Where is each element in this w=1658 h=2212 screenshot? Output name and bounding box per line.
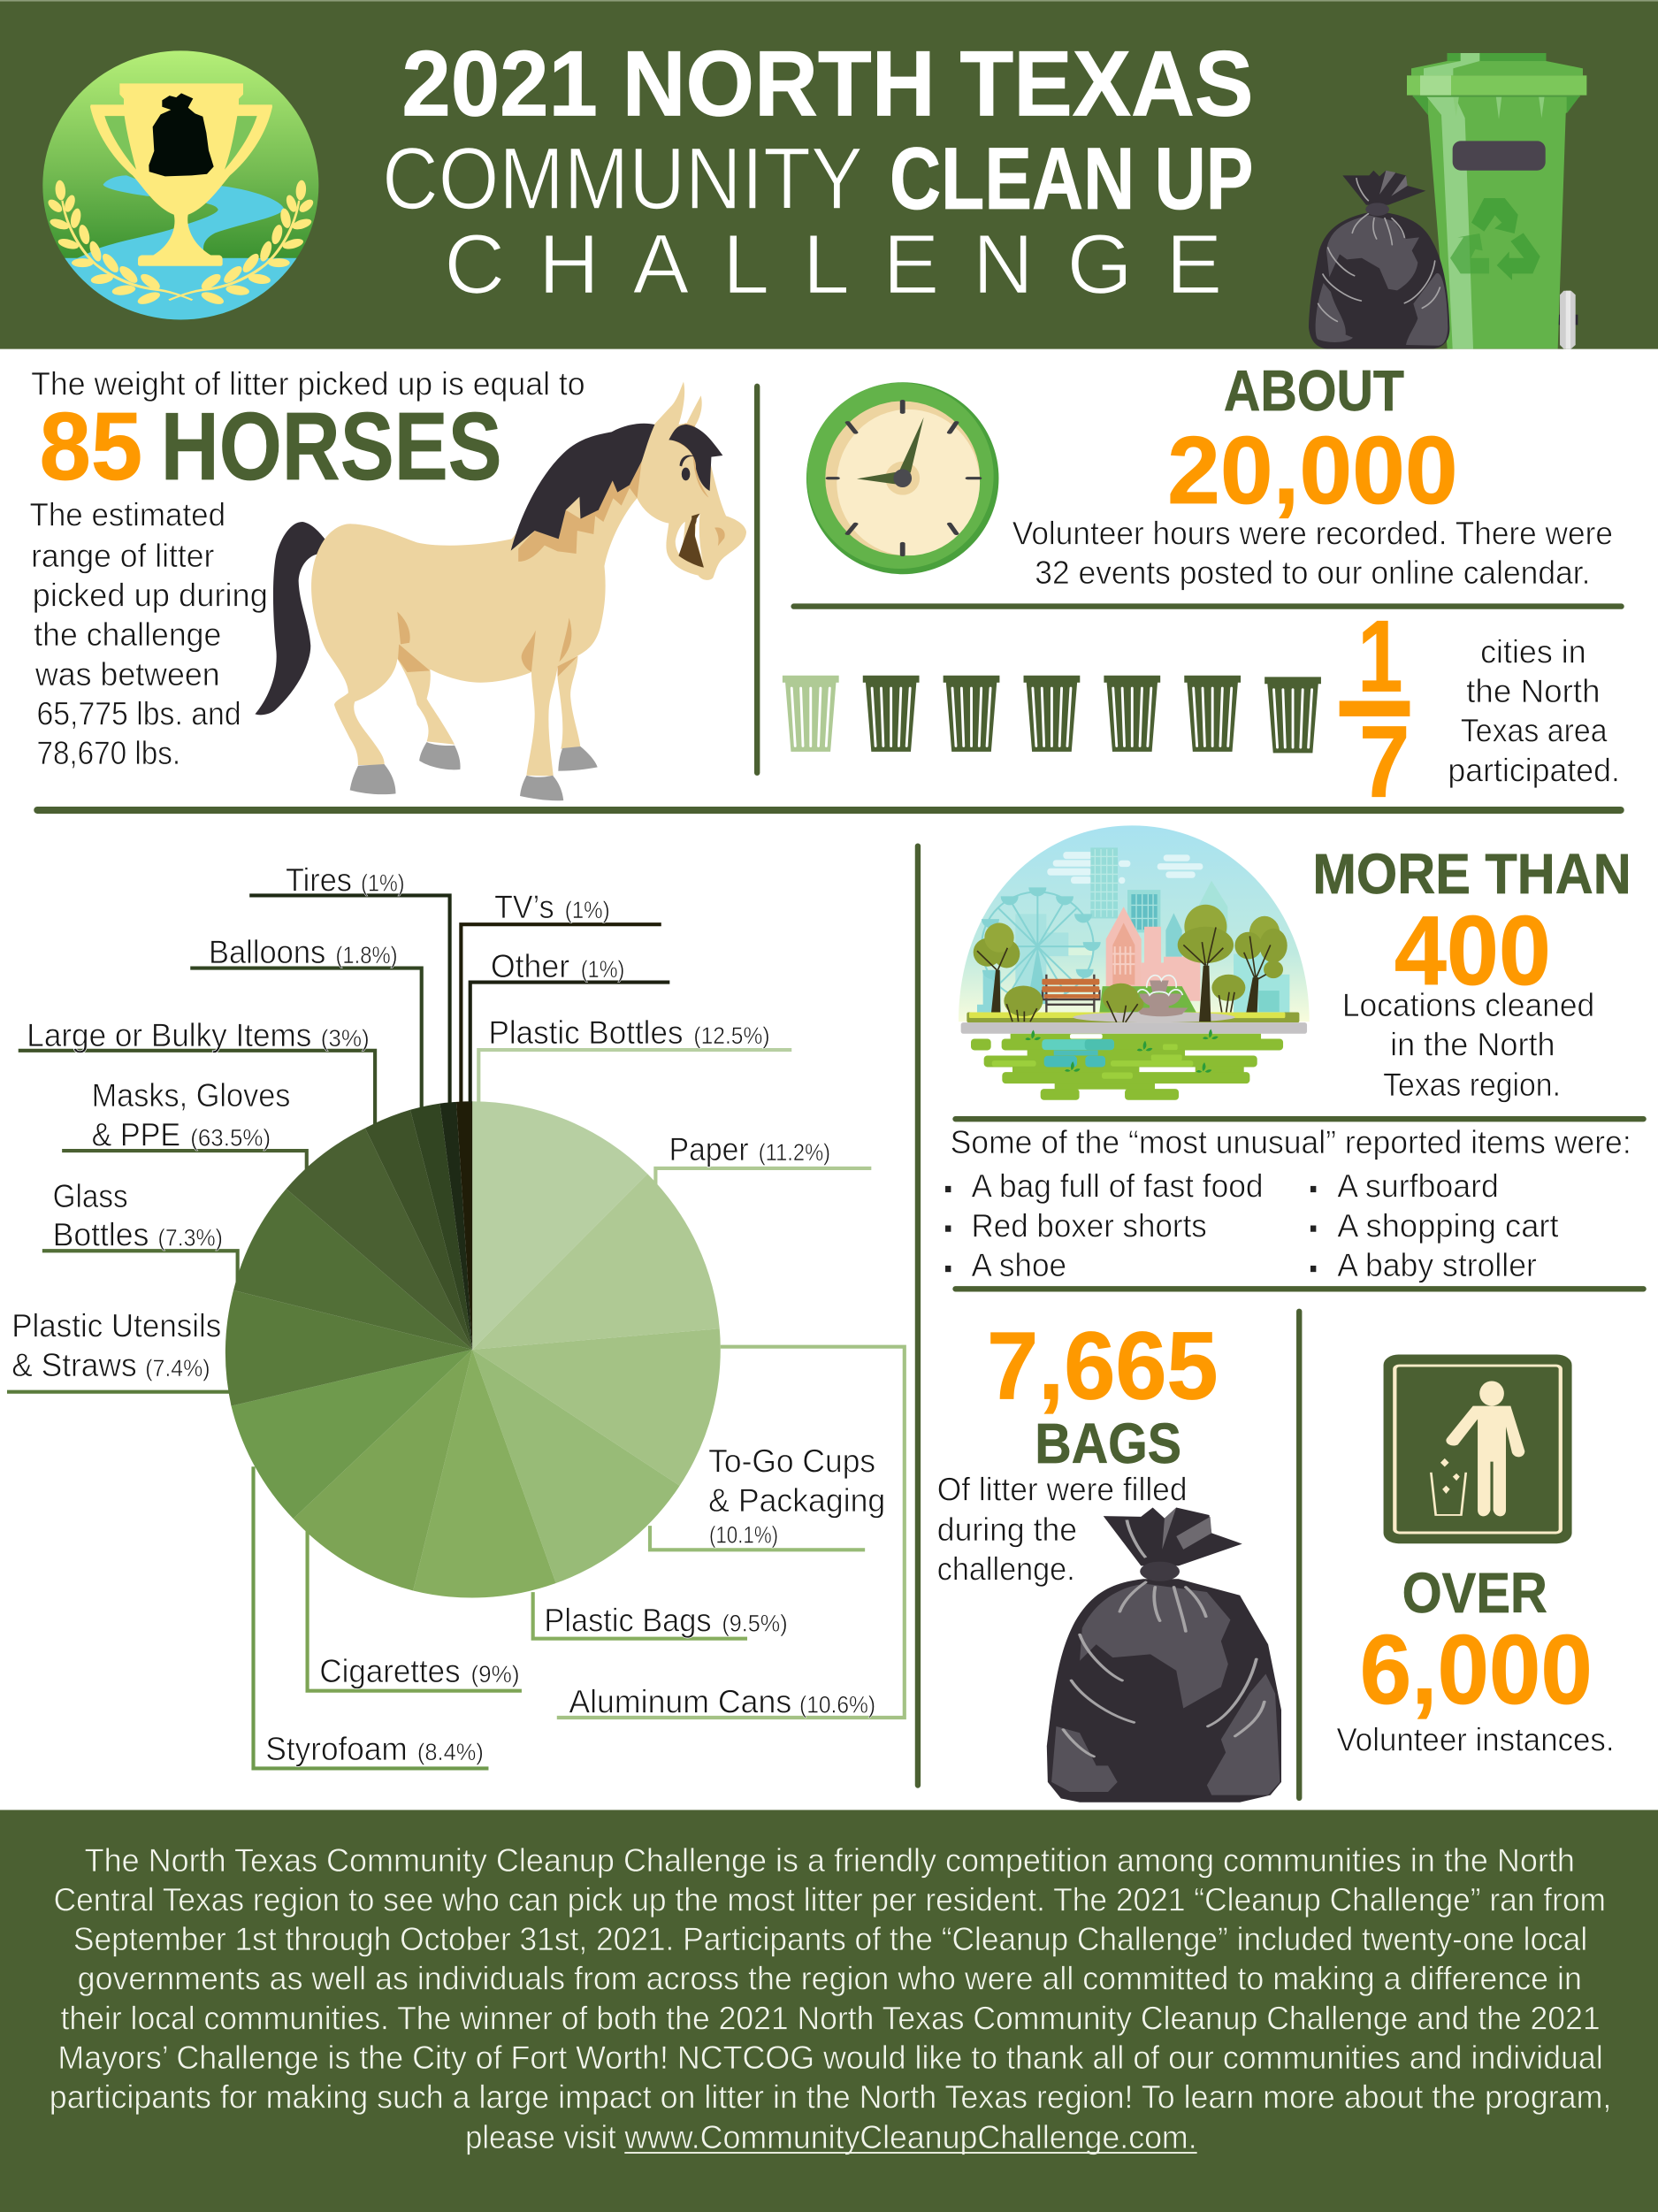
label: large or bulky items: Large or Bulky Items bbox=[27, 1017, 311, 1053]
title bbox=[382, 33, 1253, 312]
heading: horses: HORSES bbox=[161, 393, 502, 500]
text: bags: challenge. bbox=[937, 1550, 1075, 1588]
text: estimated range: 78,670 lbs. bbox=[36, 734, 180, 771]
label: aluminum cans: Aluminum Cans bbox=[569, 1683, 791, 1719]
text: volunteer instances: Volunteer instances. bbox=[1336, 1720, 1615, 1757]
section: bags bbox=[937, 1313, 1281, 1803]
heading: over: OVER bbox=[1402, 1561, 1547, 1625]
footer text: their local communities. The winner of both the 2021 North Texas Community Cleanup Challenge and the 2021 bbox=[61, 1999, 1601, 2036]
label: paper: Paper bbox=[669, 1131, 749, 1167]
label: tires bbox=[286, 862, 405, 899]
section: volunteer hours bbox=[806, 358, 1613, 591]
text: estimated range: the challenge bbox=[34, 616, 221, 653]
label: paper: (11.2%) bbox=[759, 1138, 830, 1166]
divider bbox=[915, 843, 921, 1788]
label: tvs: TV’s bbox=[494, 889, 554, 925]
footer text: The North Texas Community Cleanup Challenge is a friendly competition among communities in the North bbox=[85, 1841, 1575, 1879]
text: estimated range: range of litter bbox=[31, 537, 214, 574]
text: locations: Locations cleaned bbox=[1342, 986, 1594, 1023]
list: right column: A surfboard bbox=[1337, 1167, 1499, 1205]
stat: 85: 85 bbox=[40, 393, 142, 500]
label: balloons bbox=[209, 934, 398, 970]
label: aluminum cans: (10.6%) bbox=[799, 1690, 875, 1718]
section: unusual items bbox=[945, 1123, 1631, 1283]
label: balloons: (1.8%) bbox=[335, 941, 398, 968]
divider bbox=[1296, 1309, 1302, 1801]
label: plastic bags: Plastic Bags bbox=[544, 1603, 712, 1639]
icon: seven trash cans bbox=[783, 676, 1321, 753]
icon: recycling bin bbox=[1407, 53, 1586, 348]
text: bags: during the bbox=[937, 1511, 1077, 1548]
label: to-go cups bbox=[708, 1443, 885, 1548]
footer text: www.CommunityCleanupChallenge.com. bbox=[623, 2118, 1197, 2155]
divider bbox=[754, 384, 760, 776]
text: locations: Texas region. bbox=[1383, 1066, 1561, 1103]
text: cities bbox=[1448, 632, 1620, 788]
label: masks gloves ppe: Masks, Gloves bbox=[92, 1077, 290, 1114]
heading: about: ABOUT bbox=[1224, 358, 1404, 423]
title line 1: 2021 NORTH TEXAS bbox=[401, 33, 1253, 136]
text: estimated range: picked up during bbox=[33, 577, 268, 614]
text: estimated range: 65,775 lbs. and bbox=[36, 695, 241, 732]
label: other: (1%) bbox=[581, 955, 624, 983]
label: tvs bbox=[494, 889, 610, 925]
label: tires: Tires bbox=[286, 862, 352, 899]
label: masks gloves ppe: & PPE bbox=[92, 1116, 180, 1152]
chart: pie chart of litter types bbox=[7, 862, 905, 1768]
stat: one seventh bbox=[1340, 600, 1410, 819]
divider bbox=[952, 1116, 1647, 1121]
icon: horse bbox=[255, 382, 746, 800]
text: unusual items intro: Some of the “most unusual” reported items were: bbox=[951, 1123, 1631, 1160]
label: to-go cups: (10.1%) bbox=[709, 1520, 778, 1548]
stat: 400: 400 bbox=[1394, 895, 1551, 1006]
footer text: September 1st through October 31st, 2021. Participants of the “Cleanup Challenge” included twenty-one local bbox=[73, 1920, 1587, 1957]
stat: 20,000: 20,000 bbox=[1167, 417, 1458, 524]
label: glass bottles bbox=[53, 1178, 223, 1253]
footer text: participants for making such a large impact on litter in the North Texas region! To learn more about the program, bbox=[50, 2078, 1611, 2116]
label: glass bottles: Bottles bbox=[53, 1217, 149, 1253]
divider bbox=[34, 807, 1624, 814]
title line 3: CHALLENGE bbox=[444, 218, 1222, 312]
section: locations bbox=[959, 825, 1631, 1103]
label: to-go cups: To-Go Cups bbox=[708, 1443, 875, 1480]
text: estimated range: was between bbox=[34, 655, 220, 693]
label: masks gloves ppe: (63.5%) bbox=[190, 1123, 271, 1151]
icon: city park bbox=[959, 825, 1310, 1100]
text: locations: in the North bbox=[1390, 1025, 1555, 1062]
label: styrofoam: (8.4%) bbox=[417, 1738, 484, 1765]
icon: small trash bag bbox=[1309, 171, 1449, 348]
text: weight intro: The weight of litter picked up is equal to bbox=[31, 364, 585, 402]
label: glass bottles: (7.3%) bbox=[158, 1224, 223, 1251]
text: bags: Of litter were filled bbox=[937, 1470, 1187, 1507]
heading: bags: BAGS bbox=[1035, 1412, 1181, 1475]
label: tvs: (1%) bbox=[565, 896, 610, 923]
label: plastic utensils: Plastic Utensils bbox=[11, 1308, 221, 1344]
text: hours bbox=[1012, 514, 1613, 591]
list: left column bbox=[945, 1167, 1264, 1283]
divider bbox=[952, 1286, 1647, 1291]
text: estimated range bbox=[29, 496, 268, 771]
footer text: please visit bbox=[465, 2118, 616, 2155]
label: masks gloves ppe bbox=[92, 1077, 290, 1152]
text: cities: participated. bbox=[1448, 751, 1620, 788]
list: right column: A baby stroller bbox=[1337, 1246, 1537, 1283]
icon: recycling bin and trash bag bbox=[1309, 53, 1586, 348]
label: cigarettes: (9%) bbox=[471, 1660, 520, 1688]
footer text bbox=[50, 1841, 1611, 2155]
text: bags bbox=[937, 1470, 1187, 1588]
label: styrofoam bbox=[265, 1731, 484, 1767]
label: tires: (1%) bbox=[361, 869, 405, 897]
label: plastic utensils bbox=[11, 1308, 221, 1383]
leader lines bbox=[7, 895, 905, 1768]
header band bbox=[0, 0, 1658, 349]
label: paper bbox=[669, 1131, 830, 1167]
label: glass bottles: Glass bbox=[53, 1178, 128, 1214]
pie slices bbox=[225, 1101, 721, 1598]
footer text: Central Texas region to see who can pick up the most litter per resident. The 2021 “Cleanup Challenge” ran from bbox=[54, 1880, 1606, 1917]
label: plastic bottles: (12.5%) bbox=[693, 1022, 770, 1049]
divider bbox=[791, 603, 1624, 609]
label: other bbox=[491, 948, 624, 984]
list: right column bbox=[1310, 1167, 1559, 1283]
text: hours: Volunteer hours were recorded. There were bbox=[1012, 514, 1613, 551]
label: other: Other bbox=[491, 948, 569, 984]
list: left column: A shoe bbox=[972, 1246, 1066, 1283]
label: styrofoam: Styrofoam bbox=[265, 1731, 408, 1767]
footer panel bbox=[0, 1810, 1658, 2212]
label: plastic utensils: & Straws bbox=[11, 1347, 137, 1383]
list: left column: Red boxer shorts bbox=[972, 1206, 1207, 1244]
label: cigarettes: Cigarettes bbox=[319, 1653, 461, 1689]
stat: 7,665: 7,665 bbox=[987, 1313, 1219, 1420]
label: balloons: Balloons bbox=[209, 934, 325, 970]
title line 2: COMMUNITY bbox=[382, 130, 863, 227]
list: left column: A bag full of fast food bbox=[972, 1167, 1264, 1205]
icon: trophy logo bbox=[42, 50, 318, 320]
footer text: Mayors’ Challenge is the City of Fort Worth! NCTCOG would like to thank all of our communities and individual bbox=[57, 2039, 1603, 2076]
text: estimated range: The estimated bbox=[29, 496, 225, 533]
text: hours: 32 events posted to our online calendar. bbox=[1035, 554, 1590, 591]
icon: no littering sign bbox=[1384, 1354, 1572, 1543]
footer text: governments as well as individuals from across the region who were all committed to making a difference in bbox=[78, 1960, 1582, 1997]
text: cities: the North bbox=[1466, 672, 1601, 709]
list: right column: A shopping cart bbox=[1337, 1206, 1559, 1244]
icon: trash bag bbox=[1047, 1507, 1281, 1803]
stat: one seventh: 1 bbox=[1357, 600, 1402, 713]
section: horses bbox=[29, 364, 746, 800]
text: cities: cities in bbox=[1480, 632, 1586, 670]
text: cities: Texas area bbox=[1461, 712, 1608, 749]
title line 2 bold: CLEAN UP bbox=[890, 130, 1253, 227]
stat: one seventh: 7 bbox=[1359, 706, 1410, 819]
label: plastic bags: (9.5%) bbox=[722, 1610, 788, 1637]
icon: clock bbox=[806, 382, 998, 574]
label: plastic bottles: Plastic Bottles bbox=[488, 1014, 683, 1051]
label: to-go cups: & Packaging bbox=[708, 1482, 885, 1519]
text: locations bbox=[1342, 986, 1594, 1103]
heading: more than: MORE THAN bbox=[1312, 842, 1631, 906]
stat: 6,000: 6,000 bbox=[1360, 1614, 1593, 1725]
label: large or bulky items: (3%) bbox=[321, 1024, 370, 1052]
section: volunteer instances bbox=[1336, 1354, 1615, 1757]
label: plastic utensils: (7.4%) bbox=[145, 1354, 210, 1382]
section: cities bbox=[783, 600, 1620, 819]
